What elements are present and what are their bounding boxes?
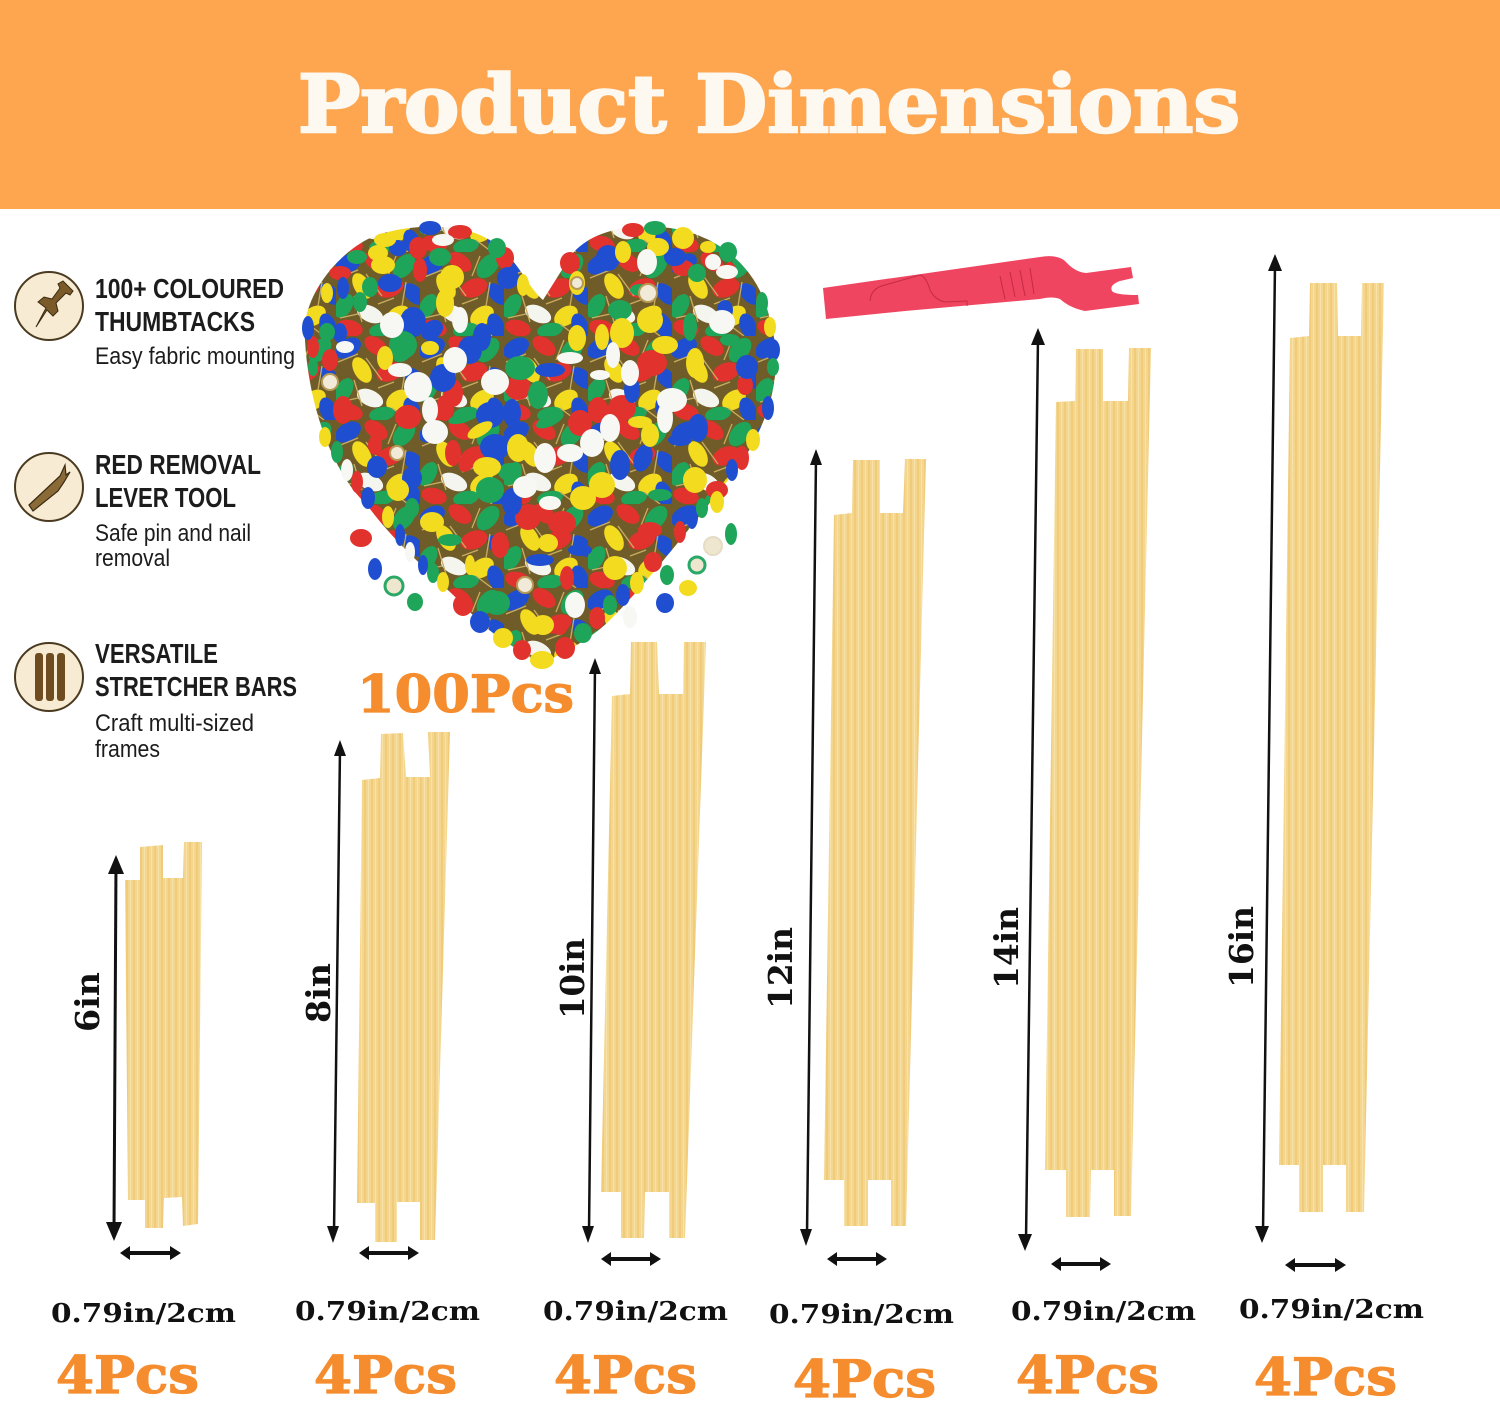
feature 1 text: Easy fabric mounting (95, 343, 295, 370)
icon: push pin (15, 272, 83, 340)
feature 2 text: removal (95, 545, 170, 572)
feature 3 text: Craft multi-sized (95, 710, 254, 737)
stretcher bar 12in (761, 449, 954, 1402)
heart of coloured thumbtacks (302, 221, 780, 669)
length label: 6in (68, 972, 107, 1032)
bar (125, 842, 202, 1228)
width arrow (601, 1252, 661, 1266)
stretcher bar 16in (1222, 254, 1424, 1402)
loose pins with rings (385, 537, 722, 595)
length label: 8in (299, 963, 338, 1023)
width label: 0.79in/2cm (543, 1297, 728, 1327)
width arrow (120, 1246, 181, 1260)
feature 1 text: 100+ COLOURED (95, 273, 284, 304)
width label: 0.79in/2cm (769, 1300, 954, 1330)
title: Product Dimensions (298, 57, 1240, 151)
feature 3 text: frames (95, 736, 160, 763)
feature 1 text: THUMBTACKS (95, 306, 255, 337)
icon: lever tool (15, 453, 83, 521)
header banner (0, 0, 1500, 209)
stretcher bar 8in (295, 732, 480, 1402)
bar (357, 732, 450, 1242)
bar (601, 642, 706, 1238)
feature 3 text: VERSATILE (95, 638, 218, 669)
width arrow (1285, 1258, 1346, 1272)
length label: 10in (553, 938, 592, 1019)
length arrow (327, 740, 346, 1243)
length arrow (1018, 328, 1045, 1251)
feature 2 text: Safe pin and nail (95, 520, 251, 547)
length arrow (800, 449, 822, 1246)
icon: red removal lever tool (823, 256, 1139, 319)
bar (1279, 283, 1384, 1212)
width label: 0.79in/2cm (51, 1299, 236, 1329)
width label: 0.79in/2cm (1239, 1295, 1424, 1325)
bar (1045, 348, 1151, 1217)
feature 3 text (95, 638, 297, 763)
width arrow (1051, 1257, 1111, 1271)
stretcher bar 6in (51, 842, 236, 1402)
stretcher bar 14in (987, 328, 1196, 1402)
width arrow (827, 1252, 887, 1266)
feature 2 text: LEVER TOOL (95, 482, 236, 513)
width label: 0.79in/2cm (1011, 1297, 1196, 1327)
length arrow (1255, 254, 1282, 1243)
length label: 14in (987, 907, 1026, 989)
feature 1 text (95, 273, 295, 370)
length label: 12in (761, 927, 800, 1009)
panel: feature list (15, 272, 297, 763)
width arrow (359, 1246, 419, 1260)
stretcher bar 10in (543, 642, 728, 1402)
length arrow (106, 855, 124, 1241)
feature 3 text: STRETCHER BARS (95, 671, 297, 702)
label: 100Pcs: 100Pcs (357, 665, 574, 725)
length arrow (582, 658, 601, 1243)
feature 2 text: RED REMOVAL (95, 449, 261, 480)
bar (824, 459, 926, 1226)
icon: stretcher bars (15, 643, 83, 711)
feature 2 text (95, 449, 261, 572)
length label: 16in (1222, 906, 1261, 988)
width label: 0.79in/2cm (295, 1297, 480, 1327)
